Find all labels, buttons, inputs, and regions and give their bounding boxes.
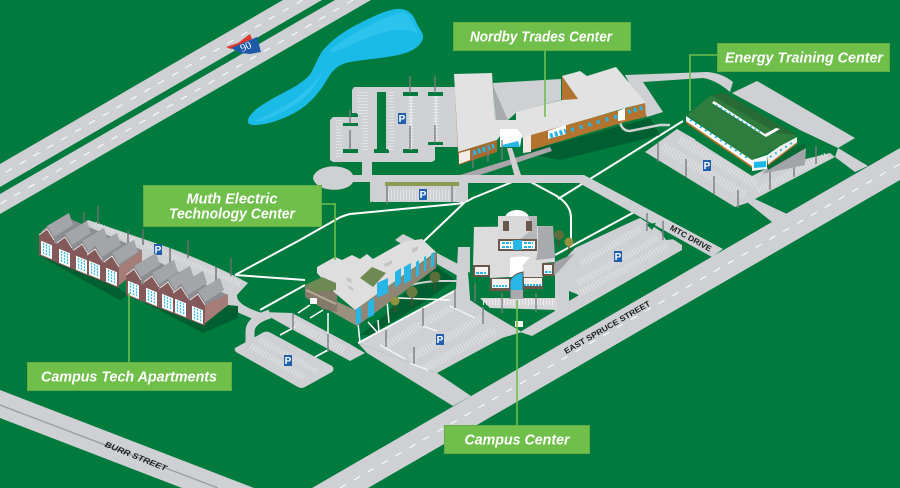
parking signs: P <box>399 114 406 125</box>
callout: Campus Tech Apartments: Campus Tech Apartments <box>41 368 217 386</box>
parking stripes and poles on the Muth access road <box>280 305 345 357</box>
parking lot: Nordby <box>330 76 458 162</box>
trees near Muth <box>390 272 440 312</box>
callout: Campus Tech Apartments <box>28 293 232 390</box>
road labels <box>104 223 714 473</box>
parking signs: P <box>615 252 622 263</box>
building: Campus Center <box>468 210 575 327</box>
road labels: EAST SPRUCE STREET <box>563 299 652 356</box>
road labels: MTC DRIVE <box>668 223 714 254</box>
parking lot: front of Nordby <box>370 182 468 204</box>
parking lot: Energy Training Center <box>645 81 855 208</box>
callout: Muth Electric Technology Center: Muth Electric <box>186 190 278 208</box>
parking signs: P <box>420 190 427 201</box>
building: Energy Training Center <box>686 93 806 176</box>
building: Campus Tech Apartments east block <box>126 253 228 326</box>
shadows under apartments <box>39 255 238 333</box>
building: Campus Tech Apartments west block <box>39 213 142 288</box>
parking signs: P <box>704 161 711 172</box>
callout: Nordby Trades Center <box>454 22 630 117</box>
callout: Energy Training Center: Energy Training Center <box>725 50 884 66</box>
parking lot: apartments <box>80 206 270 320</box>
building: Nordby Trades Center <box>454 67 670 178</box>
road: East Spruce Street <box>312 148 900 488</box>
parking lot: MTC Drive <box>520 213 682 336</box>
road: Burr Street <box>0 390 254 488</box>
callout: Nordby Trades Center: Nordby Trades Center <box>470 28 613 46</box>
parking signs: P <box>155 245 162 256</box>
lake <box>248 9 423 125</box>
building: Muth Electric Technology Center <box>305 234 457 343</box>
trees near Campus Center <box>554 230 574 253</box>
callout: Muth Electric Technology Center: Technology Center <box>169 206 296 222</box>
callout: Campus Center: Campus Center <box>464 432 571 448</box>
callout: Energy Training Center <box>690 44 890 111</box>
interstate 90 shield <box>226 34 261 55</box>
white footpaths <box>235 121 683 310</box>
roads and walkways around campus <box>250 72 868 406</box>
parking signs <box>154 113 711 367</box>
parking lot: Muth and Campus Center <box>358 247 522 373</box>
callout: Muth Electric Technology Center <box>144 186 335 260</box>
interstate 90 shield: 90 <box>238 39 254 55</box>
road: Interstate 90 <box>0 0 371 214</box>
parking lot: south of apartments <box>235 332 334 388</box>
callout: Campus Center <box>444 300 590 454</box>
parking signs: P <box>437 335 444 346</box>
parking signs: P <box>285 356 292 367</box>
road labels: BURR STREET <box>104 440 169 473</box>
